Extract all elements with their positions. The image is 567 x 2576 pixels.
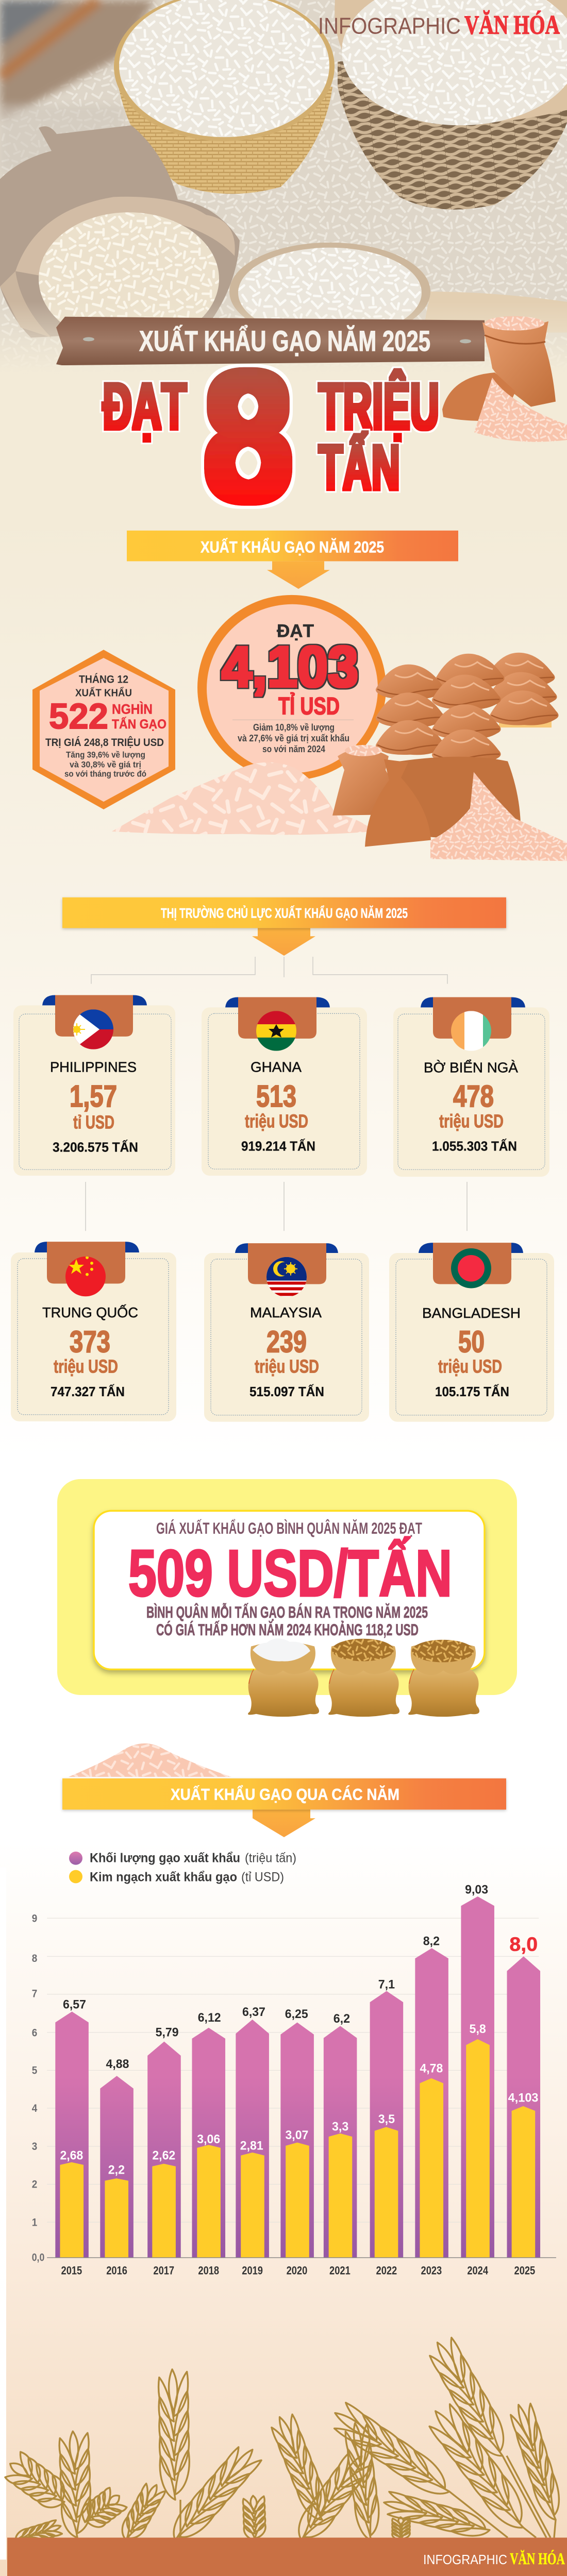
photo: left basket	[114, 0, 335, 194]
title line: XUẤT KHẨU GẠO NĂM 2025	[139, 325, 430, 357]
y axis labels: 5	[32, 2064, 37, 2077]
price panel: 509 USD/tấn: CÓ GIÁ THẤP HƠN NĂM 2024 KHOẢNG 118,2 USD	[156, 1620, 419, 1639]
section banner: thị trường chủ lực	[62, 897, 506, 956]
price panel: 509 USD/tấn	[57, 1479, 517, 1695]
card: Bangladesh: BANGLADESH	[422, 1305, 521, 1321]
hexagon: tháng 12	[32, 650, 175, 809]
card: Bangladesh: 50	[458, 1325, 485, 1359]
chart legend	[69, 1851, 296, 1884]
year labels: 2019	[242, 2264, 263, 2277]
year labels: 2023	[421, 2264, 442, 2277]
volume labels: 6,57	[63, 1997, 86, 2011]
year labels: 2024	[467, 2264, 488, 2277]
card: Bờ Biển Ngà: BỜ BIỂN NGÀ	[424, 1060, 518, 1075]
card: Trung Quốc: triệu USD	[54, 1356, 118, 1377]
year labels: 2015	[61, 2264, 82, 2277]
value labels: 2,81	[240, 2138, 263, 2153]
section banner: xuất khẩu gạo năm 2025	[127, 531, 458, 589]
value labels: 3,3	[332, 2119, 348, 2133]
chart legend: Khối lượng gạo xuất khẩu	[90, 1851, 240, 1866]
section banner: xuất khẩu gạo năm 2025: XUẤT KHẨU GẠO NĂM 2025	[201, 538, 384, 556]
value labels	[60, 2022, 539, 2177]
price panel: 509 USD/tấn: 509 USD/TẤN	[128, 1536, 452, 1610]
card: Malaysia: 239	[266, 1325, 307, 1359]
headline: đạt 8 triệu tấn: TẤN	[319, 431, 400, 503]
oval: đạt 4,103 tỉ USD: Giảm 10,8% về lượng	[253, 722, 335, 733]
hexagon: tháng 12: 522	[49, 696, 108, 736]
volume labels: 6,25	[285, 2007, 308, 2021]
volume labels: 9,03	[465, 1882, 488, 1896]
volume labels: 8,2	[423, 1934, 440, 1948]
value labels: 2,68	[60, 2148, 83, 2162]
card: Philippines: tỉ USD	[73, 1112, 114, 1133]
y axis labels: 4	[32, 2103, 38, 2114]
card: Ghana: 513	[256, 1079, 296, 1113]
value labels: 3,07	[285, 2128, 308, 2142]
flag: Bangladesh	[451, 1248, 491, 1288]
section banner: xuất khẩu gạo qua các năm: XUẤT KHẨU GẠO QUA CÁC NĂM	[171, 1785, 399, 1804]
card: Malaysia: MALAYSIA	[250, 1304, 322, 1320]
volume labels	[63, 1882, 538, 2071]
footer logo: INFOGRAPHIC	[423, 2553, 507, 2567]
hexagon: tháng 12: TRỊ GIÁ 248,8 TRIỆU USD	[45, 736, 164, 749]
illustration: stacked rice sacks	[376, 653, 559, 764]
headline: đạt 8 triệu tấn	[103, 333, 439, 539]
chart legend: (triệu tấn)	[245, 1851, 296, 1866]
illustration: rice pile	[112, 762, 374, 835]
footer bar	[7, 2538, 567, 2576]
card: Trung Quốc: 373	[70, 1325, 110, 1359]
illustration: open sacks with spilled rice	[332, 745, 567, 861]
photo: burlap sack	[0, 125, 240, 345]
year labels: 2025	[514, 2264, 535, 2277]
card: Malaysia: triệu USD	[255, 1356, 319, 1377]
y axis labels: 9	[32, 1913, 37, 1925]
card: Bangladesh	[389, 1243, 554, 1422]
volume bars	[55, 1896, 540, 2258]
headline: đạt 8 triệu tấn: TRIỆU	[319, 369, 439, 444]
hero photo: rice in baskets and sack	[0, 0, 567, 374]
oval: đạt 4,103 tỉ USD: và 27,6% về giá trị xuất khẩu	[238, 733, 349, 744]
volume labels: 6,2	[333, 2011, 350, 2025]
card: Bờ Biển Ngà: 478	[453, 1079, 494, 1113]
hexagon: tháng 12: TẤN GẠO	[112, 717, 166, 732]
value bars	[60, 2039, 535, 2258]
value labels: 3,06	[197, 2132, 220, 2146]
card: Philippines: PHILIPPINES	[50, 1059, 137, 1075]
value labels: 2,2	[108, 2162, 125, 2177]
y axis labels	[32, 1913, 44, 2264]
illustration: small rice pile	[69, 1743, 231, 1777]
card: Bangladesh: 105.175 TẤN	[435, 1384, 509, 1399]
volume labels: 6,12	[198, 2010, 221, 2024]
headline: đạt 8 triệu tấn: ĐẠT	[103, 370, 187, 444]
hexagon: tháng 12: NGHÌN	[112, 701, 153, 717]
section banner: thị trường chủ lực: THỊ TRƯỜNG CHỦ LỰC XUẤT KHẨU GẠO NĂM 2025	[161, 905, 408, 921]
oval: đạt 4,103 tỉ USD	[197, 595, 386, 780]
oval: đạt 4,103 tỉ USD: TỈ USD	[278, 691, 340, 720]
card: Ghana: triệu USD	[245, 1111, 308, 1132]
chart legend: (tỉ USD)	[241, 1870, 284, 1884]
volume labels: 4,88	[106, 2057, 129, 2071]
card: Ghana: 919.214 TẤN	[241, 1139, 315, 1154]
year labels: 2021	[329, 2264, 351, 2277]
year labels: 2020	[287, 2264, 307, 2277]
y axis labels: 3	[32, 2141, 37, 2153]
bar chart: rice export volume and value 2015-2025	[32, 1882, 556, 2277]
section banner: xuất khẩu gạo qua các năm	[62, 1778, 506, 1837]
flag: Ghana	[256, 1011, 296, 1051]
illustration: rice plant outlines	[2, 2335, 567, 2549]
volume labels: 7,1	[378, 1977, 395, 1991]
card: Philippines	[13, 995, 175, 1176]
hexagon: tháng 12: XUẤT KHẨU	[75, 687, 132, 699]
hexagon: tháng 12: và 30,8% về giá trị	[70, 760, 141, 770]
illustration: sacks with spilled rice	[442, 316, 567, 442]
photo: wooden scoop with rice	[229, 243, 567, 341]
y axis labels: 7	[32, 1988, 37, 2000]
logo top right	[318, 10, 560, 40]
icon: sack of white flour	[248, 1638, 319, 1717]
year labels: 2022	[376, 2264, 397, 2277]
card: Trung Quốc	[11, 1242, 176, 1421]
y axis labels: 1	[32, 2217, 37, 2229]
left white margin strip	[0, 1868, 6, 2560]
hexagon: tháng 12: Tăng 39,6% về lượng	[66, 750, 145, 760]
card: Ghana	[202, 997, 367, 1176]
value labels: 5,8	[470, 2022, 486, 2036]
card: Bangladesh: triệu USD	[438, 1356, 502, 1377]
y axis labels: 6	[32, 2027, 37, 2039]
photo: right basket	[335, 0, 567, 210]
oval: đạt 4,103 tỉ USD: so với năm 2024	[262, 744, 325, 755]
price panel: 509 USD/tấn: GIÁ XUẤT KHẨU GẠO BÌNH QUÂN NĂM 2025 ĐẠT	[156, 1519, 422, 1537]
flag: Ivory Coast	[451, 1011, 491, 1051]
year labels: 2018	[198, 2264, 219, 2277]
card: Bờ Biển Ngà: 1.055.303 TẤN	[432, 1139, 517, 1154]
card: Philippines: 1,57	[70, 1079, 117, 1113]
volume labels: 8,0	[509, 1934, 538, 1955]
wooden title banner	[56, 317, 485, 365]
year labels	[61, 2264, 535, 2277]
card: Trung Quốc: TRUNG QUỐC	[42, 1304, 138, 1320]
card: Ghana: GHANA	[251, 1059, 302, 1075]
icon: sack of golden grain	[408, 1640, 479, 1717]
card: Philippines: 3.206.575 TẤN	[53, 1140, 138, 1155]
value labels: 3,5	[378, 2112, 395, 2126]
footer logo	[423, 2550, 565, 2568]
flag: China	[65, 1256, 106, 1296]
volume labels: 5,79	[156, 2025, 179, 2039]
y axis labels: 2	[32, 2179, 37, 2191]
value labels: 4,78	[420, 2061, 443, 2075]
hexagon: tháng 12: so với tháng trước đó	[64, 769, 146, 778]
icon: sack of grain	[328, 1639, 399, 1717]
y axis labels: 0,0	[32, 2252, 44, 2264]
year labels: 2017	[153, 2264, 174, 2277]
value labels: 4,103	[508, 2090, 539, 2105]
y axis labels: 8	[32, 1953, 37, 1964]
chart legend: Kim ngạch xuất khẩu gạo	[90, 1870, 237, 1884]
card: Malaysia	[204, 1243, 369, 1422]
card: Bờ Biển Ngà: triệu USD	[439, 1111, 504, 1132]
card: Trung Quốc: 747.327 TẤN	[51, 1384, 125, 1399]
price panel: 509 USD/tấn: BÌNH QUÂN MỖI TẤN GẠO BÁN RA TRONG NĂM 2025	[146, 1603, 428, 1621]
big number 8: 8	[203, 333, 293, 539]
flag: Malaysia	[266, 1257, 307, 1297]
logo top right: INFOGRAPHIC	[318, 13, 461, 39]
card: Malaysia: 515.097 TẤN	[249, 1384, 324, 1399]
hexagon: tháng 12: THÁNG 12	[79, 674, 128, 686]
volume labels: 6,37	[242, 2005, 265, 2019]
card: Bờ Biển Ngà	[393, 997, 549, 1177]
flag: Philippines	[71, 1009, 113, 1049]
oval: đạt 4,103 tỉ USD: ĐẠT	[277, 621, 314, 641]
value labels: 2,62	[152, 2148, 175, 2162]
oval: đạt 4,103 tỉ USD: 4,103	[222, 635, 358, 699]
year labels: 2016	[106, 2264, 127, 2277]
